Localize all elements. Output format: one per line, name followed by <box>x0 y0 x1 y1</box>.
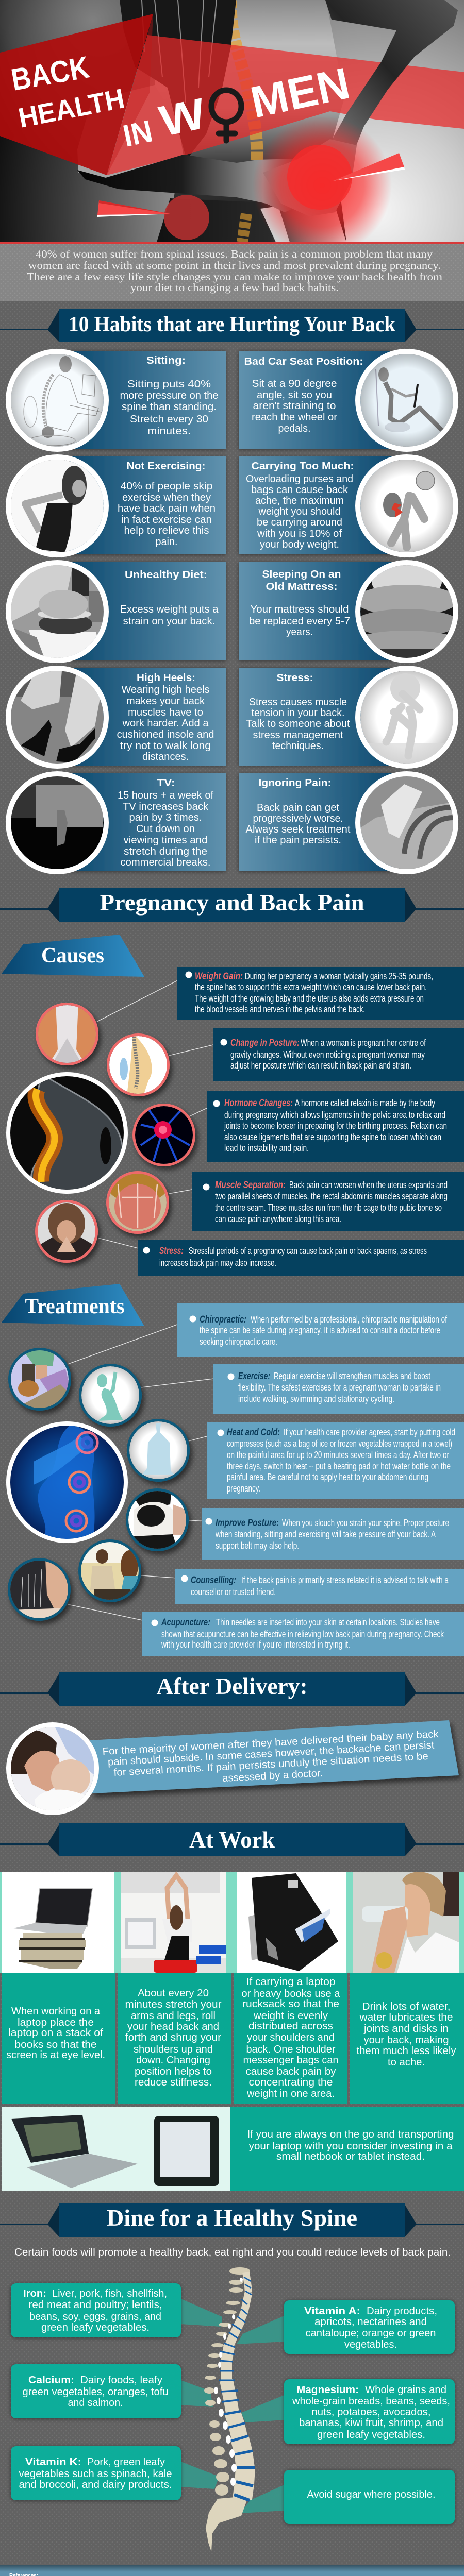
panel: acupuncture: with your health care provider if you're interested in trying it. <box>161 1639 350 1650</box>
title: IN <box>120 114 155 154</box>
panel: laptop tip <box>2 1973 115 2104</box>
panel: high heels: work harder. Add a <box>122 718 209 729</box>
panel: not exercising: pain. <box>156 536 177 548</box>
panel: ignoring pain: progressively worse. <box>253 813 343 824</box>
red pain circle <box>287 145 352 210</box>
panel: after delivery: pain should subside. In some cases however, the backache can persist <box>108 1739 435 1768</box>
panel: stretch tip <box>118 1973 231 2104</box>
icon: woman with back pain <box>8 457 106 555</box>
panel: high heels: try not to walk long <box>120 740 211 752</box>
panel: ignoring pain: Always seek treatment <box>245 824 351 835</box>
panel: carrying too much: be carrying around <box>257 517 342 528</box>
panel: muscle separation: can cause pain anywhere along this area. <box>215 1214 341 1224</box>
panel: hormone changes: lead to instability and pain. <box>224 1143 309 1153</box>
panel: netbook tip: If you are always on the go and transporting <box>247 2129 454 2140</box>
panel: weight gain <box>177 967 464 1020</box>
tag: treatments: Treatments <box>25 1295 125 1318</box>
panel: stress: Talk to someone about <box>246 718 350 730</box>
title: W <box>155 89 210 146</box>
image: woman stretching <box>121 1872 226 1973</box>
panel: bad car seat position: reach the wheel or <box>252 412 337 423</box>
image: laptop on books <box>2 1872 114 1973</box>
panel: laptop tip: When working on a <box>11 2006 101 2017</box>
panel: stretch tip: forth and shrug your <box>125 2032 221 2043</box>
panel: rucksack tip: rucksack so that the <box>242 1998 339 2010</box>
panel: rucksack tip: weight in one area. <box>246 2088 335 2099</box>
panel: sitting: minutes. <box>147 426 191 437</box>
marker dot <box>221 1039 227 1046</box>
card: vitamin k: Vitamin K: <box>25 2456 81 2468</box>
image: netbook and tablet <box>2 2107 230 2191</box>
panel: after delivery: For the majority of women after they have delivered their baby any back <box>102 1728 439 1757</box>
panel: sitting: Sitting puts 40% <box>127 379 211 390</box>
marker dot <box>213 1100 220 1107</box>
icon: stressed figure <box>358 668 456 766</box>
card: vitamin a: apricots, nectarines and <box>314 2316 427 2328</box>
card: iron: red meat and poultry; lentils, <box>29 2299 162 2311</box>
heading: 10 habits <box>0 309 464 342</box>
panel: rucksack tip: your shoulders and <box>247 2032 335 2043</box>
panel: change in posture <box>213 1028 464 1081</box>
card: magnesium <box>284 2379 455 2444</box>
panel: netbook tip <box>230 2107 464 2191</box>
marker dot <box>186 972 192 978</box>
panel: bad car seat position: Bad Car Seat Position: <box>244 356 363 367</box>
heading: at work: At Work <box>189 1826 275 1853</box>
vertebral processes <box>204 2267 250 2496</box>
card: iron: green leafy vegetables. <box>41 2322 150 2333</box>
panel: rucksack tip: cause back pain by <box>245 2066 336 2077</box>
panel: sitting: more pressure on the <box>120 390 219 401</box>
panel: tv: viewing times and <box>124 835 207 846</box>
panel: improve posture: support belt may also help. <box>216 1540 299 1551</box>
panel: unhealthy diet: Unhealthy Diet: <box>125 569 207 581</box>
panel: rucksack tip: or heavy books use a <box>241 1988 340 1999</box>
panel: heat and cold: pregnancy. <box>227 1483 260 1494</box>
heading: after delivery <box>0 1672 464 1706</box>
card: calcium: and salmon. <box>68 2397 123 2409</box>
panel: sleeping on an old mattress <box>239 562 459 660</box>
panel: stretch tip: minutes stretch your <box>125 1999 222 2010</box>
card: avoid sugar: Avoid sugar where possible. <box>307 2489 435 2500</box>
panel: intro: 40% of women suffer from spinal issues. Back pain is a common problem that many <box>36 248 433 260</box>
panel: counselling: Counselling: <box>191 1575 236 1586</box>
panel: counselling: counsellor or trusted friend. <box>191 1587 276 1597</box>
pain glow <box>256 120 390 242</box>
icon: burger <box>8 563 106 660</box>
mint strip <box>0 1872 464 1973</box>
panel: stress: stress management <box>253 730 343 741</box>
dark red ribbon <box>0 14 153 175</box>
heading: pregnancy and back pain <box>0 888 464 922</box>
panel: not exercising: exercise when they <box>122 492 211 503</box>
icon: chiropractic massage <box>9 1348 71 1410</box>
spike right <box>333 153 405 181</box>
panel: rucksack tip: back. One shoulder <box>246 2044 336 2055</box>
icon: pregnant body with pain rings <box>8 1423 126 1541</box>
panel: acupuncture <box>142 1612 464 1656</box>
white foramina <box>214 2278 243 2486</box>
card: magnesium: whole-grain breads, beans, seeds, <box>292 2396 450 2407</box>
panel: high heels: makes your back <box>126 696 205 707</box>
pain ring middle <box>69 1472 90 1493</box>
panel: stretch tip: About every 20 <box>138 1988 209 1999</box>
panel: references <box>0 2565 464 2576</box>
icon: back massage <box>358 774 456 872</box>
card: vitamin a <box>284 2300 455 2354</box>
pain ring bottom <box>66 1511 87 1531</box>
panel: chiropractic: seeking chiropractic care. <box>200 1336 277 1347</box>
card: magnesium: nuts, potatoes, avocados, <box>311 2406 431 2418</box>
panel: tv: Cut down on <box>136 823 195 835</box>
title: HEALTH <box>16 83 127 134</box>
card: calcium <box>11 2364 181 2418</box>
panel: ignoring pain: if the pain persists. <box>255 835 341 846</box>
panel: not exercising <box>8 456 226 555</box>
panel: water tip: your back, making <box>364 2035 449 2046</box>
panel: tv: commercial breaks. <box>121 857 210 868</box>
panel: bad car seat position: pedals. <box>278 423 310 434</box>
panel: stress in pregnancy <box>138 1240 464 1276</box>
panel: improve posture: Improve Posture: <box>216 1518 279 1529</box>
panel: bad car seat position <box>239 351 456 449</box>
panel: carrying too much: your body weight. <box>260 539 339 550</box>
panel: sitting: Stretch every 30 <box>130 414 208 425</box>
glowing spine <box>231 0 257 175</box>
panel: unhealthy diet: strain on your back. <box>123 616 216 627</box>
icon: tv static <box>8 774 106 872</box>
blue discs <box>219 2277 255 2500</box>
panel: tv <box>8 773 226 872</box>
icon: stressed woman <box>36 1201 97 1262</box>
card: magnesium: Magnesium: <box>296 2384 359 2396</box>
panel: high heels <box>8 668 226 766</box>
panel: stress: Stress: <box>276 672 313 684</box>
marker dot <box>181 1575 188 1582</box>
panel: sleeping on an old mattress: be replaced every 5-7 <box>249 616 350 627</box>
thumb <box>260 206 290 242</box>
heading: pregnancy and back pain: Pregnancy and Back Pain <box>100 889 364 916</box>
spike left <box>97 200 170 217</box>
callout pointers <box>181 2299 284 2513</box>
lower light ribbon edge <box>107 14 153 175</box>
tag: causes: Causes <box>41 944 104 968</box>
card: avoid sugar <box>284 2470 455 2524</box>
marker dot <box>205 1518 212 1525</box>
panel: unhealthy diet <box>8 562 226 660</box>
panel: tv: pain by 3 times. <box>129 812 202 823</box>
panel: laptop tip: laptop place the <box>18 2017 94 2028</box>
panel: stress in pregnancy: increases back pain may also increase. <box>159 1258 276 1268</box>
panel: chiropractic <box>177 1303 464 1357</box>
icon: support belt <box>127 1489 188 1551</box>
panel: laptop tip: screen is at eye level. <box>6 2049 105 2061</box>
panel: exercise <box>213 1364 464 1414</box>
panel: netbook tip: small netbook or tablet instead. <box>276 2151 425 2162</box>
panel: rucksack tip <box>234 1973 347 2104</box>
panel: counselling <box>175 1569 464 1604</box>
panel: stretch tip: down. Changing <box>136 2055 210 2066</box>
heading: dine for a healthy spine <box>0 2203 464 2237</box>
panel: not exercising: in fact exercise can <box>121 514 212 526</box>
panel: laptop tip: laptop on a stack of <box>8 2027 103 2039</box>
icon: acupuncture needles <box>9 1558 69 1620</box>
panel: carrying too much: Carrying Too Much: <box>252 461 354 472</box>
panel: after delivery: for several months. If pain persists unduly the situation needs to be <box>113 1751 428 1778</box>
panel: water tip: water lubricates the <box>359 2012 453 2023</box>
card: magnesium: green leafy vegetables. <box>317 2429 425 2441</box>
panel: bad car seat position: Sit at a 90 degree <box>252 378 337 389</box>
panel: high heels: distances. <box>142 751 189 762</box>
marker dot <box>203 1184 209 1190</box>
title: MEN <box>246 59 354 128</box>
panel: weight gain: the blood vessels and nerves in the pelvis and the back. <box>195 1004 365 1014</box>
title <box>9 49 354 154</box>
card: vitamin k: Pork, green leafy <box>87 2456 165 2468</box>
upper left arm <box>77 85 184 178</box>
marker dot <box>228 1374 234 1380</box>
panel: bad car seat position: aren't straining to <box>253 400 336 412</box>
panel: muscle separation <box>192 1172 464 1231</box>
icon: high heels <box>8 668 106 766</box>
panel: ignoring pain: Back pain can get <box>257 802 339 814</box>
panel: intro: There are a few easy life style changes you can make to improve your back health from <box>27 270 442 283</box>
card: vitamin a: Dairy products, <box>367 2306 437 2317</box>
red divider <box>0 242 464 244</box>
sacrum <box>206 2497 247 2552</box>
panel: stretch tip: reduce stiffness. <box>135 2077 212 2088</box>
icon: neuron <box>134 1105 194 1165</box>
card: vitamin k <box>11 2446 181 2500</box>
icon: feet on scale <box>37 1003 97 1065</box>
panel: ignoring pain: Ignoring Pain: <box>259 777 331 789</box>
panel: ignoring pain <box>239 773 456 872</box>
marker dot <box>143 1247 150 1254</box>
panel: high heels: muscles have to <box>128 707 203 718</box>
spine illustration <box>204 2267 255 2552</box>
panel: weight gain: Weight Gain: <box>195 971 243 982</box>
panel: stretch tip: arms and legs, roll <box>131 2010 216 2022</box>
icon: ice bag <box>128 1420 189 1481</box>
panel: intro <box>0 244 464 301</box>
image: backpack <box>237 1872 346 1973</box>
panel: heat and cold: Heat and Cold: <box>227 1427 280 1438</box>
panel: laptop tip: books so that the <box>14 2039 97 2050</box>
marker dot <box>190 1316 196 1322</box>
icon: female symbol <box>211 90 241 141</box>
panel: sleeping on an old mattress: Old Mattress: <box>266 581 337 592</box>
panel: rucksack tip: If carrying a laptop <box>246 1976 335 1988</box>
panel: after delivery: assessed by a doctor. <box>222 1768 323 1784</box>
panel: water tip <box>350 1973 464 2104</box>
heading: 10 habits: 10 Habits that are Hurting Your Back <box>69 313 396 336</box>
panel: tv: TV: <box>157 777 175 789</box>
card: vitamin k: and broccoli, and dairy products. <box>19 2479 172 2490</box>
icon: pregnant spine <box>8 1074 126 1192</box>
marker dot <box>218 1429 224 1436</box>
panel: stress <box>239 668 456 766</box>
forearm <box>77 155 309 212</box>
card: calcium: Dairy foods, leafy <box>80 2375 162 2386</box>
panel: water tip: them much less likely <box>357 2045 456 2057</box>
panel: not exercising: Not Exercising: <box>127 461 205 472</box>
pain ring top <box>77 1432 97 1453</box>
image: woman drinking water <box>353 1872 459 1973</box>
panel: exercise: Exercise: <box>238 1371 270 1382</box>
card: vitamin a: vegetables. <box>344 2339 397 2350</box>
panel: sitting <box>8 351 226 452</box>
panel: sitting: spine than standing. <box>122 401 217 413</box>
panel: water tip: joints and disks in <box>363 2023 449 2035</box>
card: vitamin a: Vitamin A: <box>304 2306 360 2317</box>
connector lines causes <box>97 975 224 1250</box>
panel: stretch tip: shoulders up and <box>134 2044 213 2055</box>
panel: stress: techniques. <box>272 740 324 752</box>
connector lines treatments <box>68 1319 231 1623</box>
card: vitamin k: vegetables such as spinach, kale <box>19 2468 172 2480</box>
panel: not exercising: 40% of people skip <box>121 481 212 492</box>
panel: rucksack tip: distributed across <box>248 2021 333 2032</box>
icon: mother and baby <box>8 1722 99 1815</box>
panel: intro: women are faced with at some point in their lives and most prevalent during pregnancy. <box>28 259 441 272</box>
panel: not exercising: have back pain when <box>118 503 216 514</box>
panel: sleeping on an old mattress: Sleeping On an <box>262 569 341 580</box>
panel: carrying too much: with you is 10% of <box>257 528 342 539</box>
panel: carrying too much: ache, the maximum <box>255 495 344 506</box>
panel: carrying too much: Overloading purses and <box>246 473 353 485</box>
panel: carrying too much: weight you should <box>258 506 340 517</box>
marker dot <box>152 1620 158 1626</box>
hand <box>263 139 357 216</box>
title: BACK <box>9 49 92 97</box>
panel: tv: 15 hours + a week of <box>118 790 213 801</box>
card: iron: beans, soy, eggs, grains, and <box>29 2311 161 2323</box>
panel: stress: tension in your back. <box>252 707 344 719</box>
panel: sitting: Sitting: <box>146 355 186 366</box>
icon: driving skeleton <box>358 351 456 449</box>
panel: netbook tip: your laptop with you consider investing in a <box>248 2141 453 2152</box>
icon: man sitting <box>8 351 106 452</box>
panel: intro: your diet to changing a few bad back habits. <box>130 281 339 294</box>
hero image <box>0 0 464 255</box>
panel: sleeping on an old mattress: Your mattress should <box>251 604 349 615</box>
panel: carrying too much: bags can cause back <box>251 484 349 496</box>
card: calcium: green vegetables, oranges, tofu <box>23 2386 168 2398</box>
panel: high heels: High Heels: <box>137 672 195 684</box>
lower torso shading <box>157 198 346 242</box>
icon: counselling session <box>79 1540 140 1602</box>
panel: stress: Stress causes muscle <box>249 697 347 708</box>
panel: high heels: cushioned insole and <box>117 729 214 740</box>
icon: pregnant yoga <box>80 1365 140 1425</box>
panel: high heels: Wearing high heels <box>122 684 209 696</box>
panel: heat and cold <box>207 1422 464 1499</box>
tag: treatments <box>2 1284 144 1326</box>
card: magnesium: bananas, kiwi fruit, shrimp, and <box>299 2417 443 2429</box>
panel: rucksack tip: weight is evenly <box>253 2010 328 2022</box>
panel: stress in pregnancy: Stress: <box>159 1246 184 1257</box>
card: iron: Liver, pork, fish, shellfish, <box>52 2288 167 2299</box>
icon: figure with heavy bag <box>358 457 456 555</box>
panel: chiropractic: Chiropractic: <box>200 1314 246 1325</box>
panel: improve posture <box>202 1508 464 1560</box>
lower spine <box>242 214 246 242</box>
panel: bad car seat position: angle, sit so you <box>257 389 332 401</box>
woman torso <box>155 0 346 242</box>
panel: carrying too much <box>239 456 456 555</box>
panel: rucksack tip: concentrating the <box>248 2077 333 2088</box>
icon: abdominal muscles <box>107 1172 168 1232</box>
panel: water tip: Drink lots of water, <box>362 2001 451 2012</box>
panel: after delivery <box>8 1720 459 1815</box>
panel: hormone changes: Hormone Changes: <box>224 1098 293 1109</box>
icon: pillows <box>354 563 459 660</box>
panel: tv: TV increases back <box>123 801 209 812</box>
panel: unhealthy diet: Excess weight puts a <box>120 604 219 615</box>
heading: at work <box>0 1823 464 1856</box>
hair <box>120 0 236 160</box>
tag: causes <box>2 935 144 977</box>
panel: change in posture: When a woman is pregnant her centre of <box>301 1038 426 1048</box>
panel: stretch tip: your head back and <box>127 2021 219 2032</box>
lower red circle <box>164 195 209 240</box>
card: iron <box>11 2283 181 2337</box>
panel: stretch tip: position helps to <box>135 2066 212 2077</box>
panel: rucksack tip: messenger bags can <box>243 2055 338 2066</box>
heading: dine for a healthy spine: Dine for a Healthy Spine <box>107 2205 357 2231</box>
panel: tv: stretch during the <box>124 846 207 857</box>
heading: after delivery: After Delivery: <box>157 1673 307 1699</box>
text: dine intro: Certain foods will promote a healthy back, eat right and you could reduce levels of back pain. <box>14 2247 451 2258</box>
card: iron: Iron: <box>23 2288 46 2299</box>
red ribbon <box>107 35 464 175</box>
panel: hormone changes <box>207 1091 464 1162</box>
panel: exercise: include walking, swimming and stationary cycling. <box>238 1394 394 1404</box>
card: magnesium: Whole grains and <box>365 2384 446 2396</box>
right arm <box>325 0 458 147</box>
panel: water tip: to ache. <box>388 2057 425 2068</box>
panel: acupuncture: Acupuncture: <box>161 1617 210 1628</box>
panel: sleeping on an old mattress: years. <box>286 626 313 638</box>
panel: not exercising: help to relieve this <box>124 525 209 536</box>
vertebral bodies <box>226 2272 248 2499</box>
panel: change in posture: Change in Posture: <box>230 1038 300 1048</box>
card: calcium: Calcium: <box>28 2375 74 2386</box>
icon: posture diagram <box>108 1034 168 1096</box>
panel: muscle separation: Muscle Separation: <box>215 1180 286 1191</box>
card: vitamin a: cantaloupe; orange or green <box>305 2328 436 2339</box>
